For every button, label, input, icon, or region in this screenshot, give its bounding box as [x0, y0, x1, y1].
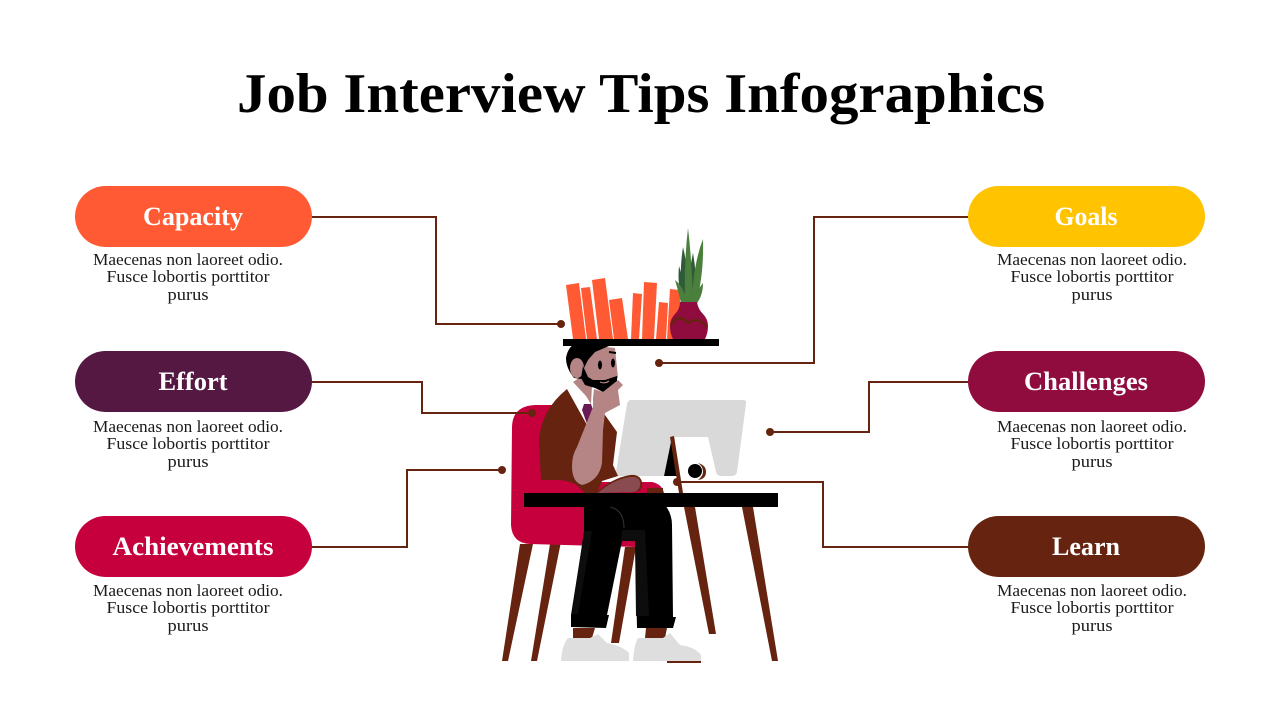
panel: goals: Maecenas non laoreet odio. [997, 250, 1187, 269]
panel: achievements [75, 516, 312, 635]
desk legs [647, 488, 778, 661]
panel: achievements: Maecenas non laoreet odio. [93, 581, 283, 600]
panel: challenges: Fusce lobortis porttitor [1010, 434, 1174, 453]
panel: learn: Fusce lobortis porttitor [1010, 598, 1174, 617]
panel: challenges: Challenges [1024, 367, 1148, 396]
panel: goals: Fusce lobortis porttitor [1010, 267, 1174, 286]
potted plant [670, 228, 708, 339]
panel: effort: Effort [158, 367, 228, 396]
connector: achievements [312, 466, 506, 547]
man arm and hand [572, 380, 623, 485]
shelf with books [563, 278, 719, 346]
panel: capacity: purus [168, 285, 208, 304]
panel: goals [968, 186, 1205, 304]
trousers [571, 493, 676, 628]
connector: learn [673, 478, 968, 547]
panel: capacity: Maecenas non laoreet odio. [93, 250, 283, 269]
connector: effort [312, 382, 536, 417]
panel: achievements: Achievements [112, 532, 274, 561]
shoes [561, 628, 701, 663]
panel: challenges: purus [1072, 452, 1112, 471]
connector: goals [655, 217, 968, 367]
computer monitor [616, 400, 746, 493]
panel: capacity: Fusce lobortis porttitor [106, 267, 270, 286]
panel: goals: purus [1072, 285, 1112, 304]
panel: effort [75, 351, 312, 471]
panel: effort: Maecenas non laoreet odio. [93, 417, 283, 436]
desk top [524, 493, 778, 507]
panel: challenges: Maecenas non laoreet odio. [997, 417, 1187, 436]
man head [566, 341, 618, 404]
illustration: man thinking at desk [502, 228, 778, 663]
panel: learn [968, 516, 1205, 635]
connector: capacity [312, 217, 565, 328]
chair legs [502, 507, 636, 661]
panel: learn: Maecenas non laoreet odio. [997, 581, 1187, 600]
panel: capacity [75, 186, 312, 304]
panel: effort: purus [168, 452, 208, 471]
title: Job Interview Tips Infographics [237, 63, 1045, 125]
man torso and jacket [539, 382, 642, 493]
connector: challenges [766, 382, 968, 436]
panel: learn: Learn [1052, 532, 1121, 561]
panel: capacity: Capacity [143, 202, 243, 231]
red chair [511, 405, 664, 547]
panel: learn: purus [1072, 616, 1112, 635]
panel: achievements: Fusce lobortis porttitor [106, 598, 270, 617]
panel: achievements: purus [168, 616, 208, 635]
panel: challenges [968, 351, 1205, 471]
panel: effort: Fusce lobortis porttitor [106, 434, 270, 453]
panel: goals: Goals [1054, 202, 1118, 231]
